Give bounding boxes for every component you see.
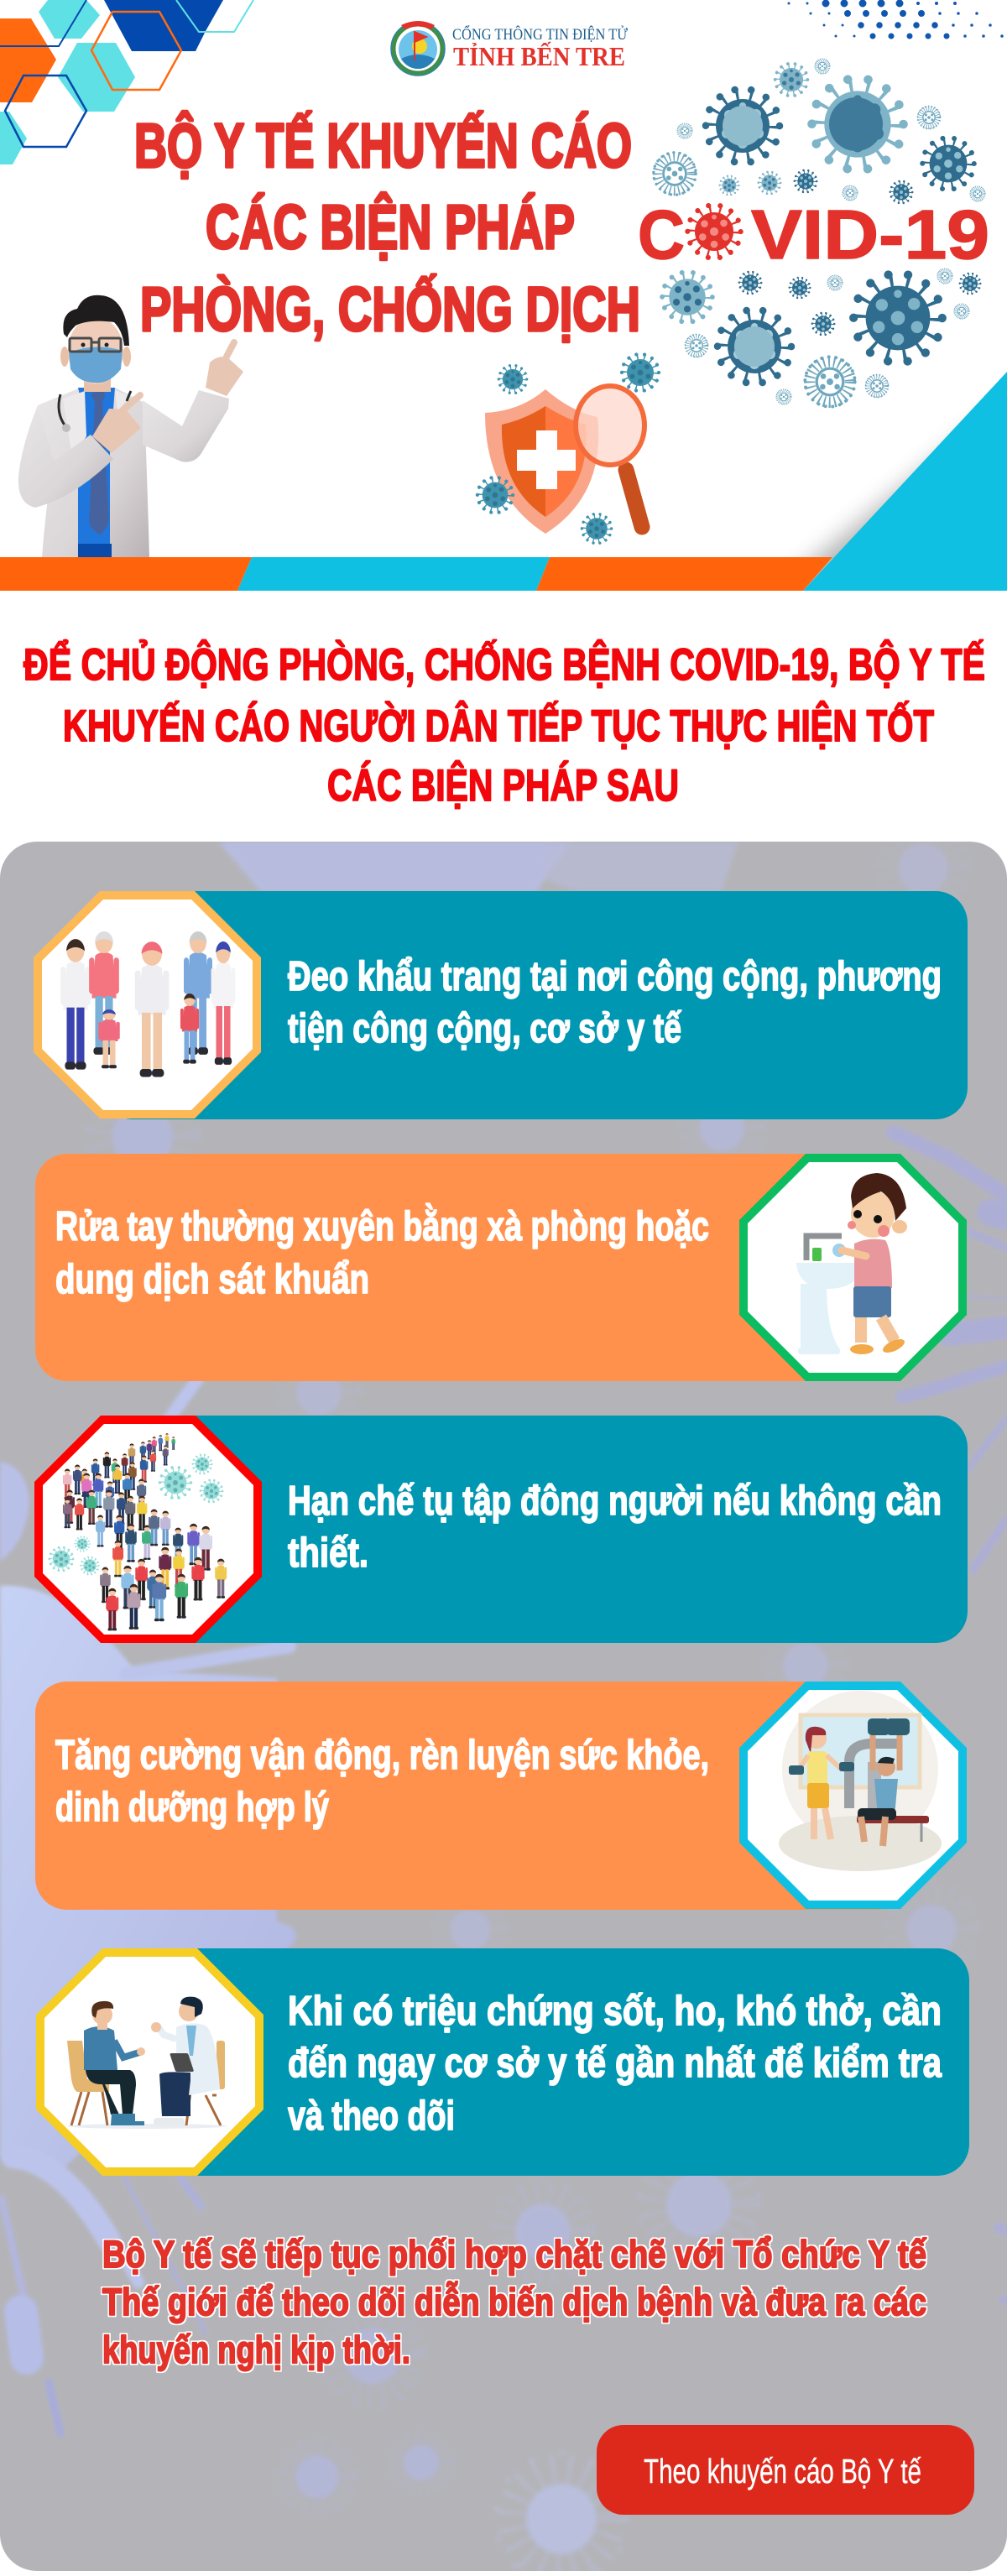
halftone dots top right [789, 3, 1007, 36]
logo: Cổng thông tin điện tử tỉnh Bến Tre [391, 21, 628, 76]
doctor [151, 1997, 225, 2125]
card 5: seek medical care [36, 1948, 969, 2176]
card text: tiện công cộng, cơ sở y tế [288, 1006, 682, 1051]
man on bench [857, 1718, 929, 1846]
title: CÁC BIỆN PHÁP [206, 192, 575, 262]
crowd people [171, 1437, 175, 1450]
card 1: masks [34, 891, 968, 1119]
logo emblem [391, 21, 445, 76]
shirt and tie [78, 388, 115, 557]
small viruses [498, 365, 527, 394]
icon: octagon with patient and doctor [36, 1948, 263, 2176]
card text [288, 1989, 942, 2139]
hand pointing up [206, 357, 243, 396]
card text: thiết. [288, 1530, 368, 1576]
doctor coat [38, 388, 149, 557]
right virus tentacles [894, 1133, 1007, 2301]
subheading: CÁC BIỆN PHÁP SAU [327, 759, 679, 811]
card text [288, 954, 942, 1051]
card text [55, 1203, 709, 1302]
COVID-19 wordmark [639, 203, 987, 260]
card background [35, 1682, 908, 1910]
COVID-19 wordmark: VID-19 [751, 196, 989, 274]
card background [101, 1948, 969, 2176]
left arm of coat [18, 405, 113, 508]
panel: grey background with virus texture [0, 821, 1007, 2576]
closing statement [102, 2233, 927, 2371]
source button [597, 2425, 974, 2515]
magnifier [626, 470, 642, 527]
title: BỘ Y TẾ KHUYẾN CÁO [134, 111, 632, 180]
card text: Tăng cường vận động, rèn luyện sức khỏe, [55, 1733, 709, 1778]
card background [35, 1154, 908, 1381]
portal name: CỔNG THÔNG TIN ĐIỆN TỬ [452, 25, 628, 44]
card text: và theo dõi [288, 2094, 455, 2139]
icon: octagon with gym scene [739, 1682, 967, 1909]
woman with dumbbells [789, 1727, 854, 1839]
closing statement: khuyến nghị kịp thời. [102, 2328, 410, 2371]
card text [288, 1478, 942, 1576]
left virus body [0, 1586, 296, 2173]
icon: octagon with boy washing hands [739, 1154, 967, 1381]
head [60, 347, 69, 367]
right arm of coat [143, 390, 229, 462]
decorative hexagons top left [0, 0, 253, 164]
card background [101, 1416, 968, 1643]
illustration: doctor in mask pointing up [18, 295, 243, 557]
card 3: avoid crowds [34, 1416, 968, 1643]
icon: octagon with crowd [34, 1416, 262, 1643]
title: PHÒNG, CHỐNG DỊCH [140, 274, 640, 344]
viruses [160, 1468, 190, 1498]
COVID-19 wordmark: C [638, 196, 685, 274]
virus texture [0, 821, 1007, 2576]
icon: octagon with masked people [34, 891, 261, 1119]
card background [101, 891, 968, 1119]
card text: Rửa tay thường xuyên bằng xà phòng hoặc [55, 1203, 709, 1249]
sink [801, 1284, 839, 1348]
patient [67, 2001, 145, 2125]
virus cluster above COVID-19 [654, 59, 985, 203]
boy [854, 1239, 892, 1288]
card text [55, 1733, 709, 1830]
cyan corner triangle [803, 372, 1007, 591]
title [134, 111, 640, 344]
card 2: hand washing [35, 1154, 967, 1381]
corner shadow [796, 430, 952, 591]
bottom colour band [0, 557, 832, 591]
virus cluster below COVID-19 [662, 269, 980, 407]
faint background viruses [86, 821, 978, 2576]
subheading [23, 639, 985, 811]
hand on chest [92, 409, 141, 453]
illustration: shield with plus and magnifier [477, 354, 659, 544]
header banner [0, 0, 1007, 591]
province name: TỈNH BẾN TRE [453, 41, 625, 71]
card text: dung dịch sát khuẩn [55, 1257, 369, 1302]
icon: red virus as letter O [687, 205, 741, 258]
stethoscope [59, 394, 65, 426]
card 4: exercise [35, 1682, 967, 1910]
card text: dinh dưỡng hợp lý [55, 1785, 329, 1830]
